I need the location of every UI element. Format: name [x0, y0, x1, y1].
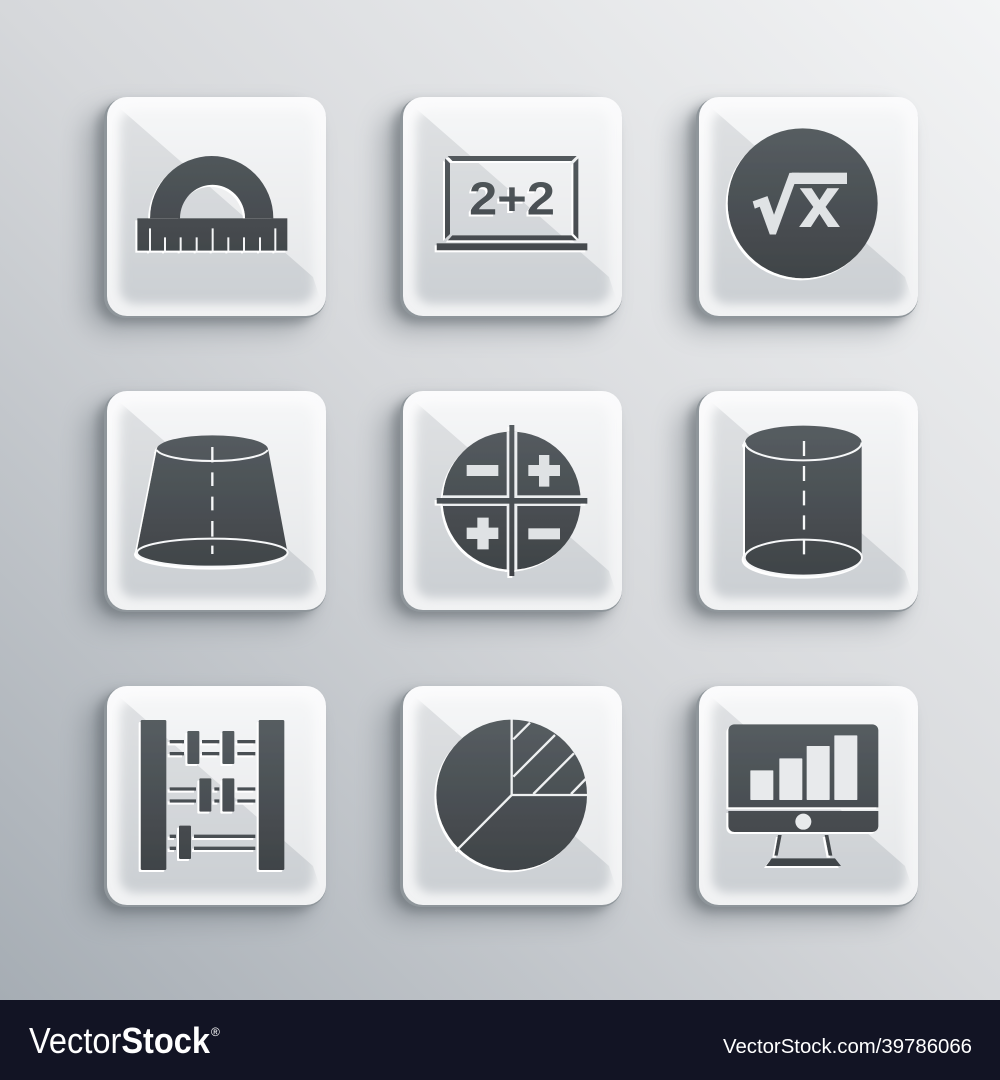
footer bar [0, 1000, 1000, 1080]
icon: square root of x: √ [752, 169, 798, 248]
icon: pie chart [436, 719, 588, 870]
panel: cylinder card [677, 391, 918, 625]
icon: blackboard with sum: 2+2 [469, 173, 555, 225]
footer logo: VectorStock [29, 1020, 211, 1061]
registered mark: ® [211, 1025, 220, 1039]
panel: square root card [677, 97, 918, 331]
panel: pie chart card [381, 686, 622, 920]
footer image id: VectorStock.com/39786066 [723, 1036, 972, 1058]
panel: abacus card [85, 686, 326, 920]
panel: blackboard card [381, 97, 622, 331]
icon: monitor with bar chart [728, 724, 878, 866]
icon: circle with plus and minus signs [437, 425, 587, 576]
panel: plus minus card [381, 391, 622, 625]
icon: blackboard with sum [437, 156, 587, 250]
icon: square root of x: x [800, 163, 840, 243]
panel: frustum card [85, 391, 326, 625]
icon: abacus [141, 720, 284, 870]
icon: cylinder [745, 426, 862, 576]
panel: protractor card [85, 97, 326, 331]
icon: square root of x [728, 128, 878, 278]
icon: protractor with ruler [137, 156, 287, 251]
icon: truncated cone [137, 435, 288, 567]
panel: monitor card [677, 686, 918, 920]
